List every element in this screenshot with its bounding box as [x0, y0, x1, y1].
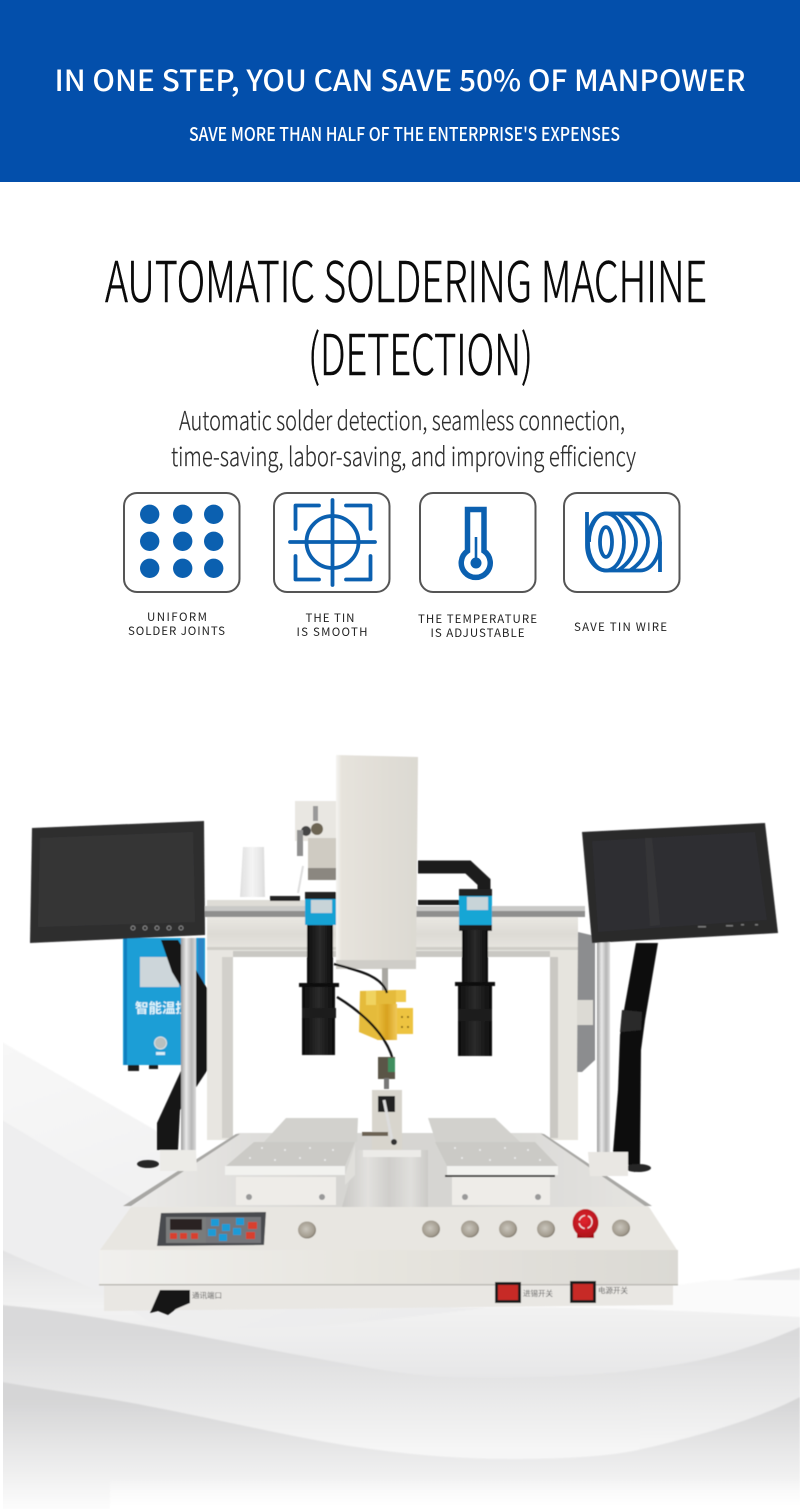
solder nozzle	[378, 1057, 395, 1089]
caption: the tin is smooth	[296, 610, 368, 640]
right support arm	[612, 943, 658, 1165]
right monitor	[582, 823, 778, 943]
caption: uniform solder joints: UNIFORM	[147, 609, 207, 625]
banner headline: IN ONE STEP, YOU CAN SAVE 50% OF MANPOWER	[54, 58, 746, 100]
left silver pillar	[181, 938, 196, 1150]
soldering machine	[30, 755, 778, 1315]
right silver pillar	[597, 942, 610, 1152]
left monitor	[30, 821, 205, 943]
z-axis column	[336, 755, 418, 968]
right camera	[455, 889, 495, 1056]
caption: the temperature is adjustable	[418, 611, 537, 641]
header banner	[0, 0, 800, 182]
frame: legs and beam	[205, 896, 585, 1140]
column foot	[336, 960, 416, 969]
left corner block	[160, 1150, 197, 1171]
center rail	[342, 1150, 428, 1207]
gold solder head	[359, 990, 413, 1040]
blue temperature controller: 智能温控	[135, 997, 189, 1017]
table side strips	[123, 1134, 652, 1206]
power switch	[570, 1281, 628, 1303]
right arm joint	[620, 1010, 642, 1032]
icon captions	[128, 609, 667, 641]
feed switch	[495, 1282, 553, 1303]
title: (DETECTION)	[308, 311, 533, 392]
front panel upper	[100, 1207, 677, 1250]
control panel	[157, 1212, 266, 1246]
icon: wire spool	[564, 493, 680, 592]
subtitle text: time-saving, labor-saving, and improving efficiency	[171, 437, 636, 474]
caption: uniform solder joints: SOLDER JOINTS	[128, 623, 225, 639]
front panel base	[104, 1285, 673, 1311]
power switch: 电源开关	[598, 1285, 628, 1296]
table top	[131, 1133, 649, 1207]
rod	[382, 968, 388, 992]
left platform	[225, 1118, 358, 1205]
caption: uniform solder joints	[128, 609, 225, 639]
caption: save tin wire: SAVE TIN WIRE	[574, 619, 667, 635]
left support arm	[157, 940, 217, 1150]
connector port: 通讯端口	[192, 1290, 222, 1301]
caption: the tin is smooth: IS SMOOTH	[296, 624, 368, 640]
right base disc	[625, 1164, 651, 1172]
panel buttons	[298, 1220, 630, 1238]
wire feeder	[295, 801, 336, 893]
left base disc	[137, 1160, 159, 1168]
black cable chain	[418, 867, 484, 905]
connector port	[150, 1290, 222, 1315]
left camera	[299, 892, 339, 1055]
feed switch: 进锡开关	[523, 1288, 553, 1299]
title	[105, 238, 707, 392]
blue temperature controller	[123, 938, 205, 1071]
icon: thermometer	[420, 493, 536, 592]
white spool cup	[240, 847, 265, 897]
emergency stop button	[572, 1209, 598, 1238]
right platform	[428, 1118, 558, 1205]
right corner block	[588, 1152, 628, 1176]
right bracket	[577, 1000, 593, 1025]
solder cables	[334, 964, 393, 1060]
caption: the temperature is adjustable: IS ADJUSTABLE	[430, 625, 525, 641]
icon: solder joints	[124, 493, 240, 592]
subtitle text	[171, 401, 636, 474]
right side cable chain	[577, 932, 595, 1072]
banner subheadline: SAVE MORE THAN HALF OF THE ENTERPRISE'S EXPENSES	[189, 120, 620, 147]
caption: the tin is smooth: THE TIN	[306, 610, 354, 626]
background: grey waves	[2, 1042, 800, 1509]
front panel middle	[99, 1250, 678, 1285]
center test stand	[362, 1090, 421, 1157]
icon: crosshair	[274, 493, 390, 592]
white edge strips	[0, 1030, 3, 1509]
subtitle text: Automatic solder detection, seamless connection,	[179, 401, 625, 438]
caption: the temperature is adjustable: THE TEMPERATURE	[418, 611, 537, 627]
